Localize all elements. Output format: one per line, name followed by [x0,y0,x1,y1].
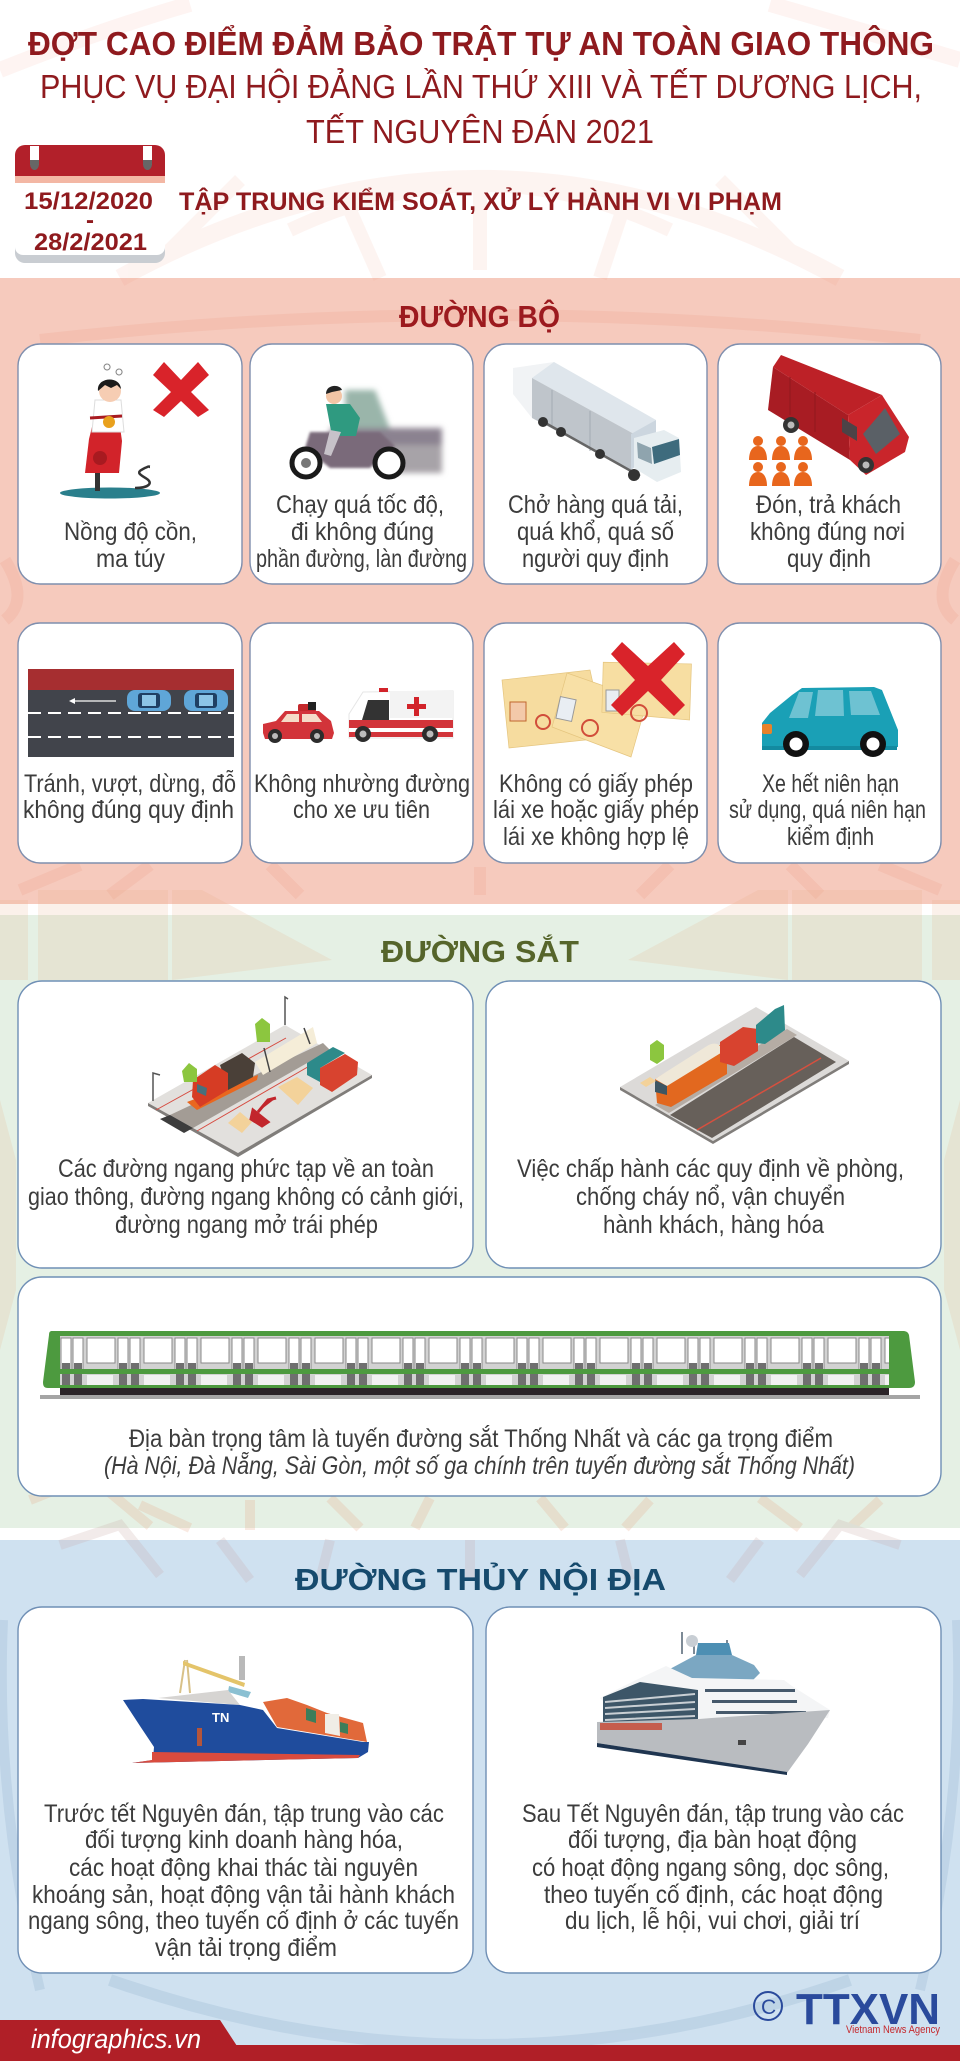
label: Nồng độ cồn, [64,518,197,546]
label: lái xe hoặc giấy phép [493,796,699,824]
footer bar [0,2020,960,2061]
label: quá khổ, quá số [517,518,674,546]
label: quy định [787,545,871,573]
label: (Hà Nội, Đà Nẵng, Sài Gòn, một số ga chính trên tuyến đường sắt Thống Nhất) [104,1451,855,1480]
label: không đúng quy định [23,796,234,824]
label [508,491,683,573]
label: Không nhường đường [254,770,470,798]
label: khoáng sản, hoạt động vận tải hành khách [32,1881,455,1909]
label [256,491,467,573]
icon: passengers [749,436,812,486]
panel: no driving licence [484,623,707,863]
label: theo tuyến cố định, các hoạt động [544,1881,883,1909]
label: ma túy [96,545,165,573]
icon: freight yard isometric [148,997,372,1157]
panel: speeding [250,344,473,584]
label: đối tượng, địa bàn hoạt động [568,1826,857,1854]
label: ngang sông, theo tuyến cố định ở các tuyến [28,1907,459,1935]
icon: ambulance [349,688,453,742]
label: Sau Tết Nguyên đán, tập trung vào các [522,1800,904,1828]
heading: rail: ĐƯỜNG SẮT [381,933,579,969]
icon: passenger train isometric [620,1005,849,1144]
label: Việc chấp hành các quy định về phòng, [517,1155,904,1183]
icon: container ship: TN [212,1710,229,1725]
label: Các đường ngang phức tạp về an toàn [58,1155,434,1183]
label [28,1155,464,1239]
label [28,1800,459,1962]
heading: inland waterway: ĐƯỜNG THỦY NỘI ĐỊA [295,1561,666,1597]
icon: truck [513,362,681,482]
title [28,24,934,150]
icon: speeding motorcycle [292,386,442,477]
train: locomotive and tanker [187,1027,317,1110]
label: đi không đúng [291,518,434,546]
icon: road with cars [28,669,234,757]
label: Xe hết niên hạn [762,770,899,798]
logo: TTXVN: C [761,1996,776,2019]
label: Trước tết Nguyên đán, tập trung vào các [44,1800,444,1828]
label [64,518,197,573]
icon: long metro train [40,1331,920,1399]
label: không đúng nơi [750,518,905,546]
icon: red van [768,355,909,475]
label [493,770,699,851]
label: Chở hàng quá tải, [508,491,683,519]
label: du lịch, lễ hội, vui chơi, giải trí [565,1906,860,1935]
label: vận tải trọng điểm [155,1934,337,1962]
label: có hoạt động ngang sông, dọc sông, [532,1854,889,1882]
heading: road: ĐƯỜNG BỘ [399,298,560,334]
label [522,1800,904,1935]
panel: illegal pick-up [718,344,941,584]
label: hành khách, hàng hóa [603,1211,824,1239]
label [254,770,470,824]
label: Địa bàn trọng tâm là tuyến đường sắt Thống Nhất và các ga trọng điểm [129,1424,833,1453]
panel: priority vehicles [250,623,473,863]
logo: TTXVN: Vietnam News Agency [846,2024,940,2036]
panel: before Tet [18,1607,473,1973]
subtitle: TẬP TRUNG KIỂM SOÁT, XỬ LÝ HÀNH VI VI PHẠM [179,186,782,216]
calendar with dates: 15/12/2020 [24,188,153,215]
title: ĐỢT CAO ĐIỂM ĐẢM BẢO TRẬT TỰ AN TOÀN GIAO THÔNG [28,24,934,62]
label: Chạy quá tốc độ, [276,491,444,519]
label: Tránh, vượt, dừng, đỗ [24,769,236,798]
label [104,1424,855,1480]
panel: expired vehicles [718,623,941,863]
label [750,491,905,573]
label: Đón, trả khách [756,491,901,519]
label: giao thông, đường ngang không có cảnh giới, [28,1183,464,1211]
panel: overloaded truck [484,344,707,584]
icon: red car [263,702,334,743]
label: cho xe ưu tiên [293,796,430,824]
icon: scooter rider with red cross [60,362,209,498]
panel: after Tet [486,1607,941,1973]
label: đường ngang mở trái phép [115,1211,378,1239]
icon: licences with red cross [502,642,694,757]
label: phần đường, làn đường [256,545,467,573]
label [517,1155,904,1239]
panel: alcohol and drugs [18,344,242,584]
label: Không có giấy phép [499,770,693,798]
label: kiểm định [787,823,874,851]
label [23,769,236,824]
panel: key routes [18,1277,941,1496]
label: người quy định [522,545,669,573]
calendar with dates: 28/2/2021 [34,229,147,256]
icon: teal car [762,687,898,757]
label: đối tượng kinh doanh hàng hóa, [85,1826,403,1854]
icon: container ship [123,1656,369,1763]
footer bar: infographics.vn [31,2024,201,2054]
icon: cruise ship [597,1632,830,1775]
label [729,770,926,851]
title: TẾT NGUYÊN ĐÁN 2021 [306,113,654,150]
label: chống cháy nổ, vận chuyển [576,1183,845,1211]
panel: fire safety [486,981,941,1268]
label: các hoạt động khai thác tài nguyên [69,1854,418,1882]
panel: level crossings [18,981,473,1268]
calendar with dates [15,145,165,263]
calendar with dates: - [86,207,94,234]
panel: overtaking and parking [18,623,242,863]
label: lái xe không hợp lệ [503,823,689,851]
logo: TTXVN: TTXVN [796,1985,940,2034]
